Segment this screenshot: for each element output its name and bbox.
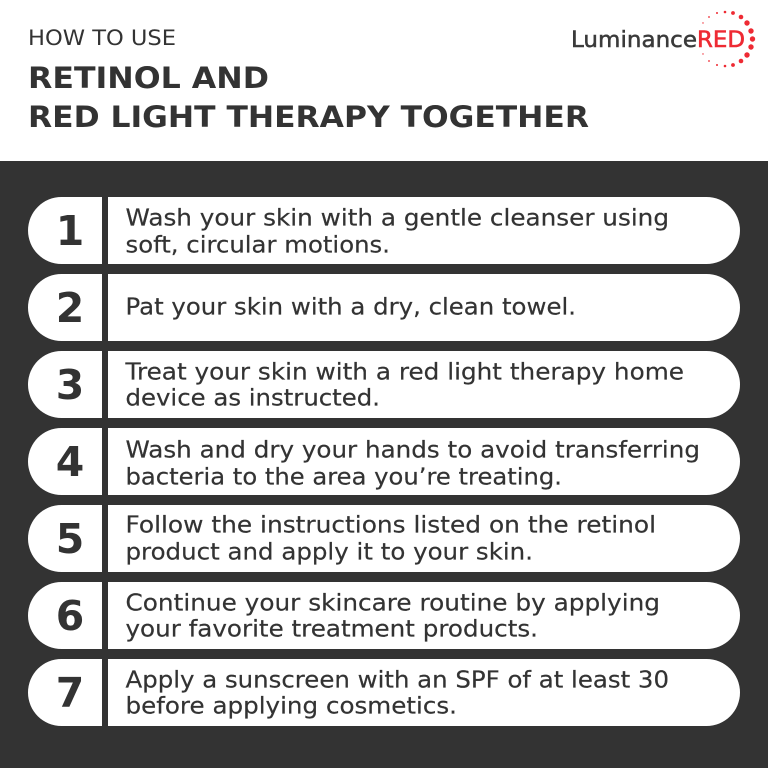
step 4: Wash and dry your hands to avoid transferring [126,438,700,464]
step 6 [28,582,740,649]
dark panel [0,161,768,768]
step 7 [28,659,740,726]
step 4: 4 [56,438,84,486]
step 1: 1 [56,207,84,255]
step 3 [28,351,740,418]
step 3: Treat your skin with a red light therapy home [124,360,684,386]
step 2 [28,274,740,341]
logo: LuminanceRED: Luminance [571,28,697,53]
step 5: 5 [56,515,84,563]
logo: LuminanceRED: RED [697,28,745,53]
step 4 [28,428,740,495]
step 6: your favorite treatment products. [126,616,538,642]
step 5 [28,505,740,572]
step 6: Continue your skincare routine by applying [126,590,660,616]
icon: red dotted arc [702,11,755,67]
header background [0,0,768,161]
logo: LuminanceRED [571,11,755,67]
step 2: Pat your skin with a dry, clean towel. [126,294,576,320]
step 5: product and apply it to your skin. [126,540,533,566]
step 5: Follow the instructions listed on the retinol [126,512,656,538]
step 2: 2 [56,284,84,332]
step 7: Apply a sunscreen with an SPF of at least 30 [126,668,669,694]
title: RETINOL AND [28,61,269,95]
eyebrow heading: HOW TO USE [28,26,176,50]
step 1 [28,197,740,264]
title [28,61,589,134]
step 7: before applying cosmetics. [126,694,457,720]
step 1: soft, circular motions. [126,232,390,258]
step 3: device as instructed. [126,386,380,412]
step 4: bacteria to the area you’re treating. [126,464,562,490]
step 6: 6 [56,592,84,640]
step 3: 3 [56,361,84,409]
step 7: 7 [56,669,84,717]
title: RED LIGHT THERAPY TOGETHER [28,100,589,134]
step 1: Wash your skin with a gentle cleanser using [126,206,669,232]
